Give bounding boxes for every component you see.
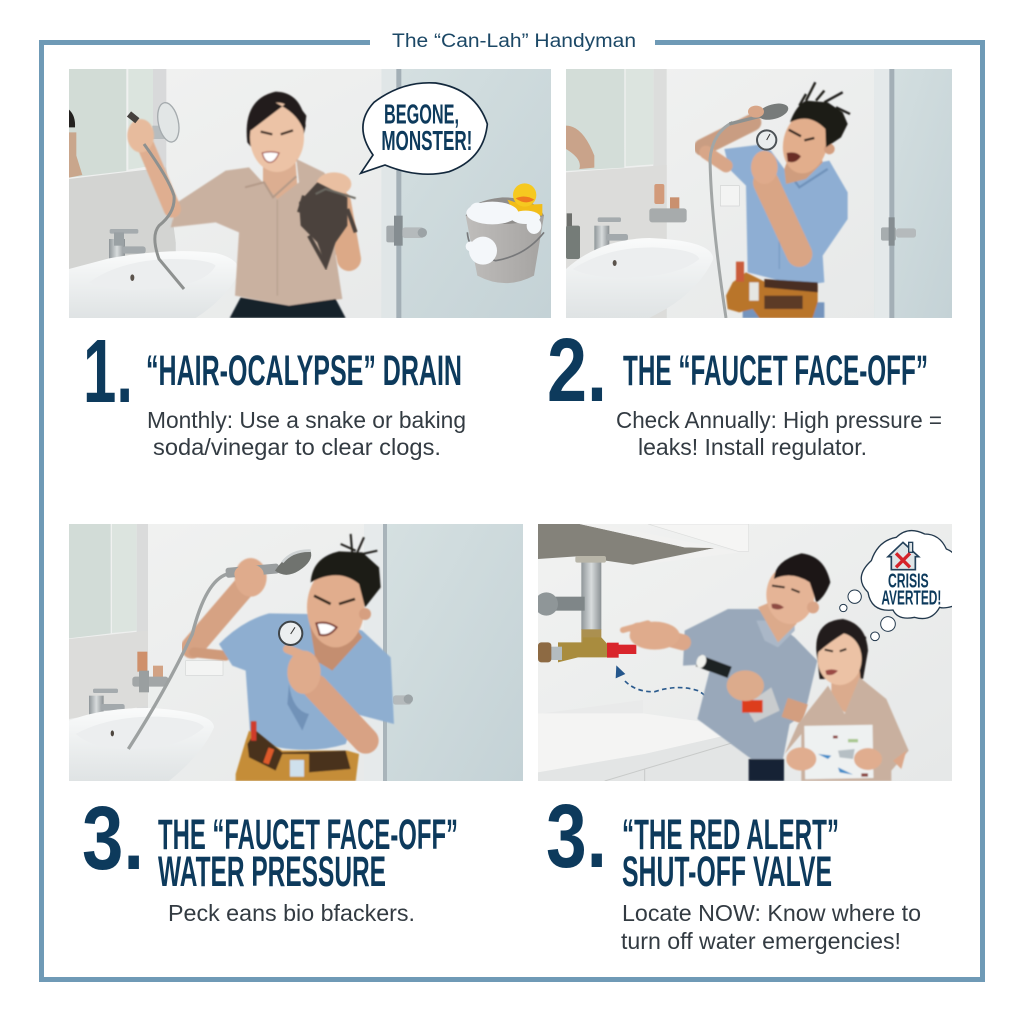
shelf with toiletries <box>132 652 168 692</box>
panel: man with shower head and gauge <box>69 524 523 781</box>
tool belt <box>236 721 359 781</box>
shower hose and head <box>710 101 790 318</box>
man soaked with water <box>192 534 394 750</box>
title: The “Can-Lah” Handyman <box>392 31 636 52</box>
thought bubbles <box>840 590 895 641</box>
heading 3 (shut-off valve): 3. <box>546 787 607 887</box>
text: step 4: Locate NOW: Know where to <box>622 900 921 926</box>
speech bubble <box>361 83 487 174</box>
text: step 2 <box>616 407 942 460</box>
washbasin and tap <box>69 689 214 781</box>
hair clump <box>299 182 356 266</box>
door handle <box>386 216 427 246</box>
wall socket <box>186 661 223 675</box>
shelf with toiletries <box>649 184 687 222</box>
heading 3 (shut-off valve) <box>546 787 839 896</box>
heading 2: 2. <box>547 321 607 421</box>
man with flashlight <box>623 553 830 781</box>
shaving mirror <box>152 101 182 144</box>
woman with floor plan <box>785 619 909 781</box>
text: step 1 <box>147 407 466 460</box>
countertop <box>538 700 754 781</box>
text: step 1: soda/vinegar to clear clogs. <box>153 434 441 460</box>
heading 3: THE “FAUCET FACE-OFF” <box>158 811 458 859</box>
heading 3: 3. <box>82 789 144 889</box>
panel: woman with clogged drain hair <box>69 69 551 318</box>
panel: couple finding shut-off valve <box>538 524 952 781</box>
panel: man testing faucet pressure <box>566 69 952 318</box>
speech bubble: MONSTER! <box>381 125 472 156</box>
pipes and red valve <box>535 556 636 662</box>
shower hose <box>129 114 184 289</box>
heading 1 <box>83 322 462 422</box>
rubber duck bucket <box>466 183 544 283</box>
door handle <box>393 694 413 705</box>
heading 3 <box>82 789 458 896</box>
thought cloud: crisis averted <box>861 531 955 619</box>
wall socket <box>720 186 739 206</box>
washbasin, soap and tap <box>566 213 713 318</box>
pressure gauge <box>279 622 302 645</box>
shower hose and head <box>128 551 311 749</box>
icon: house with red cross <box>888 542 919 570</box>
text: step 1: Monthly: Use a snake or baking <box>147 407 466 433</box>
thought cloud: crisis averted: CRISIS <box>888 570 929 592</box>
dashed arrow to valve <box>616 665 721 722</box>
woman <box>127 92 351 318</box>
heading 1: 1. <box>83 322 133 422</box>
text: step 2: leaks! Install regulator. <box>638 434 867 460</box>
heading 3: WATER PRESSURE <box>158 848 386 896</box>
heading 2 <box>547 321 928 421</box>
washbasin and tap <box>69 229 239 318</box>
door handle <box>881 217 916 246</box>
pressure gauge <box>757 130 776 150</box>
heading 3 (shut-off valve): SHUT-OFF VALVE <box>622 848 832 896</box>
man with wet hair <box>703 82 850 318</box>
text: step 3: Peck eans bio bfackers. <box>168 900 415 926</box>
text: step 2: Check Annually: High pressure = <box>616 407 942 433</box>
text: step 4: turn off water emergencies! <box>621 928 901 954</box>
heading 1: “HAIR-OCALYPSE” DRAIN <box>146 347 462 395</box>
heading 3 (shut-off valve): “THE RED ALERT” <box>622 811 839 859</box>
under-sink cabinet <box>538 524 749 566</box>
speech bubble: BEGONE, <box>384 98 459 129</box>
text: step 4 <box>621 900 921 954</box>
